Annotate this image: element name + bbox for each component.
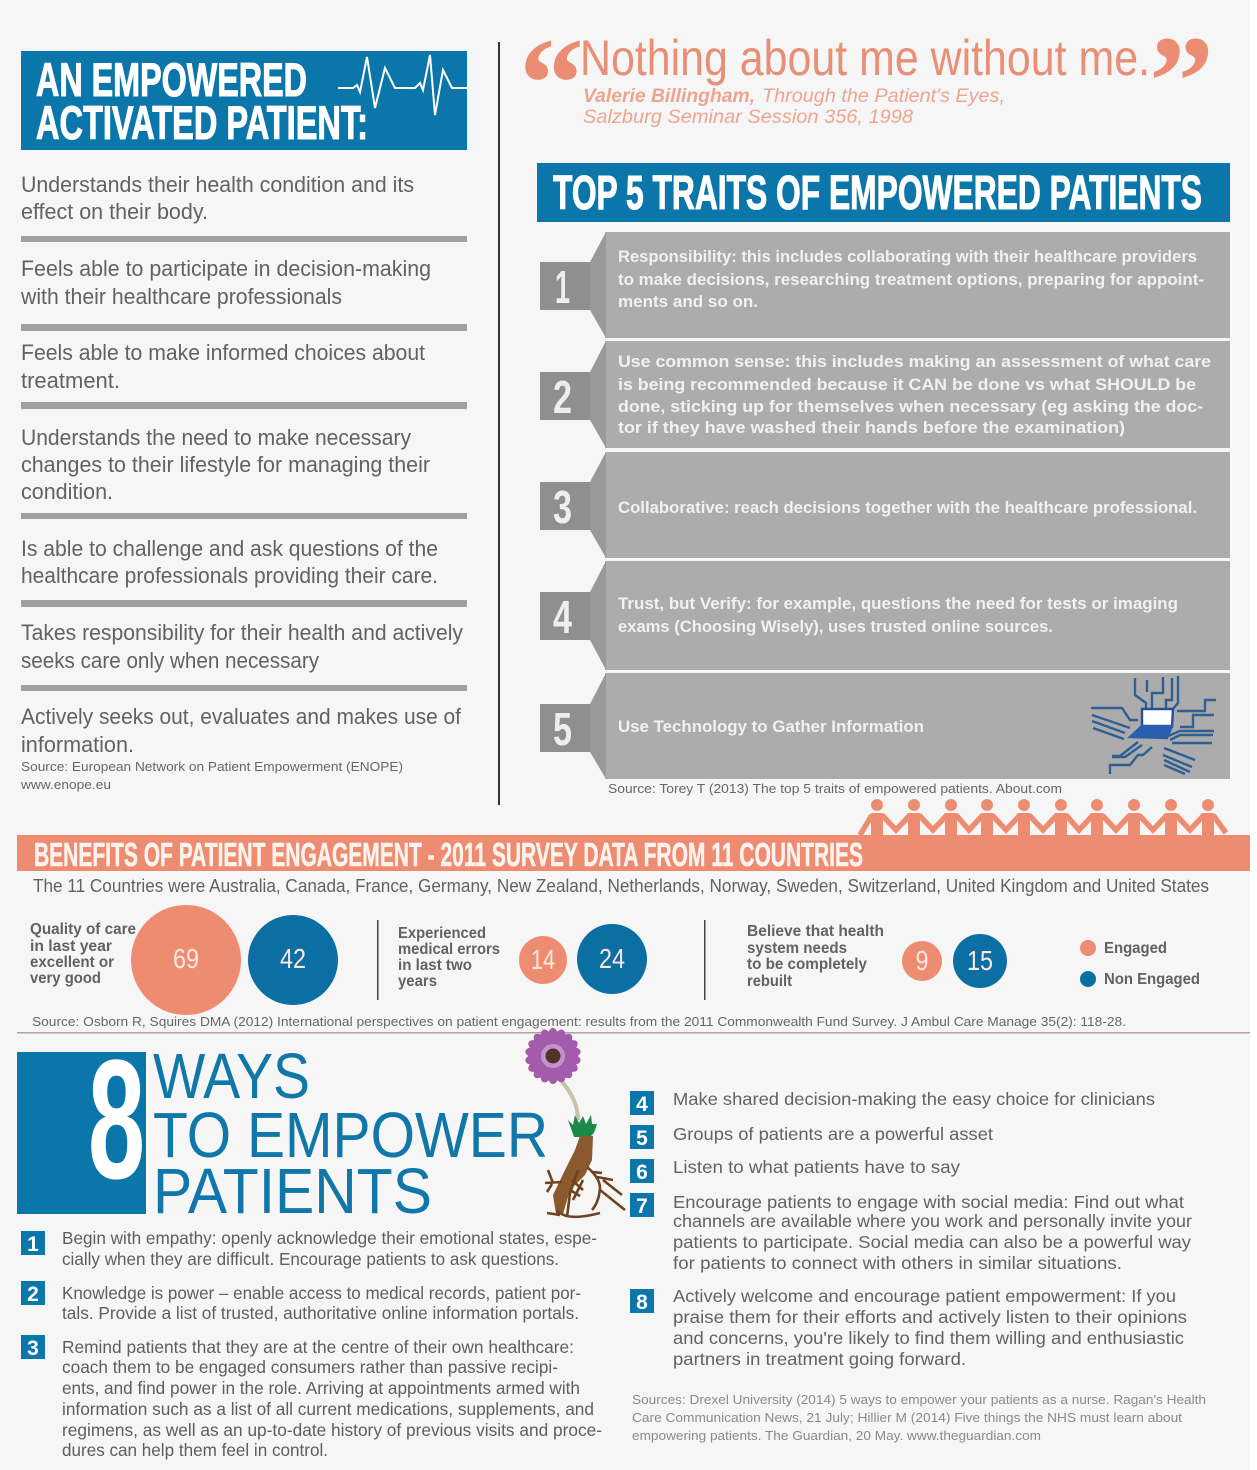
trait 1: Responsibility: this includes collaborating with their healthcare providers — [618, 247, 1197, 266]
trait 1: 1 — [555, 261, 570, 313]
list item 4: condition. — [21, 479, 113, 504]
way 3: Remind patients that they are at the centre of their own healthcare: — [62, 1337, 574, 1357]
quote attribution: Salzburg Seminar Session 356, 1998 — [583, 107, 913, 128]
legend — [1080, 940, 1200, 988]
heading: 8 — [88, 1025, 145, 1215]
opening quotation mark: “ — [519, 12, 584, 156]
trait 3: 3 — [553, 481, 572, 533]
way 2: tals. Provide a list of trusted, authoritative online information portals. — [62, 1303, 579, 1323]
way 5: Groups of patients are a powerful asset — [673, 1124, 993, 1144]
stat: health system rebuilt — [747, 923, 1007, 990]
trait 5: Use Technology to Gather Information — [618, 717, 924, 736]
trait 3: Collaborative: reach decisions together with the healthcare professional. — [618, 498, 1197, 517]
quote attribution: Through the Patient's Eyes, — [762, 86, 1005, 107]
list item 1: Understands their health condition and its — [21, 172, 414, 197]
stat: quality of care: in last year — [30, 938, 112, 955]
icon: flower with roots — [524, 1028, 625, 1217]
panel: benefits of patient engagement — [17, 799, 1250, 1029]
way 8: 8 — [636, 1291, 648, 1314]
list item 5: healthcare professionals providing their care. — [21, 563, 438, 588]
stat: medical errors — [398, 924, 647, 994]
list item 3: treatment. — [21, 368, 120, 393]
trait 2: tor if they have washed their hands before the examination) — [618, 418, 1125, 437]
trait 1 — [540, 232, 1230, 338]
way 8 — [630, 1286, 1187, 1369]
list item 6 — [21, 620, 463, 673]
list item 5: Is able to challenge and ask questions of the — [21, 536, 438, 561]
list item 3: Feels able to make informed choices about — [21, 340, 425, 365]
source note: Source: European Network on Patient Empowerment (ENOPE) — [21, 760, 403, 774]
way 4: Make shared decision-making the easy choice for clinicians — [673, 1089, 1155, 1109]
stat: medical errors: Experienced — [398, 925, 486, 942]
trait 5: 5 — [553, 703, 572, 755]
stat: quality of care: excellent or — [30, 954, 114, 971]
stat: medical errors: 24 — [599, 943, 625, 974]
quote text: Nothing about me without me. — [580, 30, 1150, 86]
way 2 — [21, 1281, 581, 1323]
way 5 — [630, 1124, 993, 1150]
heading banner — [21, 51, 467, 150]
source note: Source: Torey T (2013) The top 5 traits of empowered patients. About.com — [608, 782, 1062, 796]
sources note: Care Communication News, 21 July; Hillier M (2014) Five things the NHS must learn about — [632, 1410, 1182, 1425]
list item 1: effect on their body. — [21, 199, 208, 224]
icon: laptop circuit — [1091, 676, 1216, 774]
heading: PATIENTS — [153, 1155, 432, 1227]
way 3 — [21, 1335, 602, 1460]
way 3: coach them to be engaged consumers rather than passive recipi- — [62, 1357, 558, 1377]
trait 4: Trust, but Verify: for example, questions the need for tests or imaging — [618, 594, 1178, 613]
way 3: information such as a list of all current medications, supplements, and — [62, 1399, 594, 1419]
trait 2: Use common sense: this includes making an assessment of what care — [618, 352, 1211, 371]
list item 6: seeks care only when necessary — [21, 648, 319, 673]
way 4 — [630, 1089, 1155, 1116]
way 1: Begin with empathy: openly acknowledge their emotional states, espe- — [62, 1228, 597, 1248]
legend: Non Engaged — [1104, 971, 1200, 988]
stat: quality of care — [30, 905, 338, 1015]
heading: WAYS — [153, 1040, 310, 1112]
list item 1 — [21, 172, 414, 224]
way 2: 2 — [27, 1283, 39, 1306]
way 7: 7 — [636, 1195, 648, 1218]
quote attribution: Valerie Billingham, — [583, 86, 755, 107]
source note: Source: Osborn R, Squires DMA (2012) International perspectives on patient engagement: results from the 2011 Commonwealth Fund Survey. J Ambul Care Manage 35(2): 118-28. — [32, 1015, 1126, 1029]
closing quotation mark: ” — [1149, 10, 1214, 154]
stat: quality of care: 42 — [280, 943, 306, 974]
way 7 — [630, 1192, 1192, 1273]
list item 2 — [20, 256, 431, 309]
trait 5 — [540, 673, 1230, 779]
trait 1: to make decisions, researching treatment options, preparing for appoint- — [618, 270, 1204, 289]
heading banner: AN EMPOWERED — [36, 53, 307, 106]
list item 4: Understands the need to make necessary — [21, 425, 411, 450]
stat: quality of care: Quality of care — [30, 921, 136, 938]
heading: TO EMPOWER — [153, 1099, 548, 1171]
list item 4: changes to their lifestyle for managing their — [21, 452, 430, 477]
quote attribution — [583, 86, 1005, 128]
panel: top 5 traits — [537, 163, 1230, 796]
sources note: Sources: Drexel University (2014) 5 ways to empower your patients as a nurse. Ragan's Health — [632, 1392, 1206, 1407]
way 6 — [630, 1157, 960, 1184]
list item 5 — [21, 536, 438, 588]
heading banner: ACTIVATED PATIENT: — [36, 96, 368, 149]
trait 1: ments and so on. — [618, 292, 758, 311]
list item 7: information. — [21, 732, 134, 757]
stat: health system rebuilt: 9 — [916, 945, 928, 976]
stat: quality of care: 69 — [173, 943, 199, 974]
stat: health system rebuilt: 15 — [967, 945, 993, 976]
list item 2: Feels able to participate in decision-making — [21, 256, 431, 281]
way 8: and concerns, you're likely to find them willing and enthusiastic — [673, 1328, 1184, 1348]
way 8: Actively welcome and encourage patient empowerment: If you — [673, 1286, 1176, 1306]
trait 3 — [540, 452, 1230, 558]
stat: medical errors: years — [398, 973, 437, 990]
heading — [17, 1025, 548, 1227]
way 7: channels are available where you work and personally invite your — [673, 1211, 1192, 1231]
way 2: Knowledge is power – enable access to medical records, patient por- — [62, 1283, 581, 1303]
way 8: praise them for their efforts and actively listen to their opinions — [673, 1307, 1187, 1327]
way 4: 4 — [636, 1093, 648, 1116]
icon: row of people holding hands — [860, 799, 1226, 836]
stat: medical errors: 14 — [531, 944, 555, 975]
stat: quality of care: very good — [30, 970, 101, 987]
trait 4: 4 — [553, 591, 572, 643]
countries note: The 11 Countries were Australia, Canada, France, Germany, New Zealand, Netherlands, Norway, Sweden, Switzerland, United Kingdom and United States — [33, 876, 1209, 896]
trait 2: is being recommended because it CAN be done vs what SHOULD be — [618, 375, 1196, 394]
trait 4: exams (Choosing Wisely), uses trusted online sources. — [618, 617, 1053, 636]
stat: medical errors: medical errors — [398, 941, 500, 958]
way 7: Encourage patients to engage with social media: Find out what — [673, 1192, 1184, 1212]
panel: an empowered activated patient — [20, 51, 467, 792]
list item 7 — [21, 704, 462, 757]
legend: Engaged — [1104, 940, 1167, 957]
way 1 — [21, 1228, 597, 1269]
source note: www.enope.eu — [20, 778, 111, 792]
panel: 8 ways to empower patients — [17, 1025, 1206, 1460]
trait 2 — [540, 341, 1230, 448]
way 8: partners in treatment going forward. — [673, 1349, 966, 1369]
trait 2: 2 — [553, 371, 572, 423]
way 6: Listen to what patients have to say — [673, 1157, 960, 1177]
list item 6: Takes responsibility for their health and actively — [21, 620, 463, 645]
quote — [519, 10, 1214, 156]
way 7: for patients to connect with others in similar situations. — [673, 1253, 1122, 1273]
sources note: empowering patients. The Guardian, 20 May. www.theguardian.com — [632, 1428, 1041, 1443]
stat: medical errors: in last two — [398, 957, 472, 974]
way 3: 3 — [27, 1337, 39, 1360]
way 7: patients to participate. Social media can also be a powerful way — [673, 1232, 1191, 1252]
way 1: cially when they are difficult. Encourage patients to ask questions. — [62, 1249, 559, 1269]
trait 4 — [540, 561, 1230, 670]
stat: health system rebuilt: system needs — [747, 940, 847, 957]
stat: health system rebuilt: Believe that health — [747, 923, 884, 940]
stat: health system rebuilt: to be completely — [747, 956, 867, 973]
way 3: ents, and find power in the role. Arriving at appointments armed with — [62, 1378, 580, 1398]
way 3: regimens, as well as an up-to-date history of previous visits and proce- — [62, 1420, 602, 1440]
trait 2: done, sticking up for themselves when necessary (eg asking the doc- — [618, 397, 1203, 416]
way 6: 6 — [636, 1161, 648, 1184]
list item 3 — [21, 340, 425, 393]
stat: health system rebuilt: rebuilt — [747, 973, 792, 990]
sources note — [632, 1392, 1206, 1443]
way 1: 1 — [27, 1233, 39, 1256]
way 3: dures can help them feel in control. — [62, 1440, 328, 1460]
source note — [20, 760, 403, 792]
way 5: 5 — [636, 1127, 648, 1150]
list item 4 — [21, 425, 430, 504]
list item 7: Actively seeks out, evaluates and makes use of — [21, 704, 462, 729]
list item 2: with their healthcare professionals — [20, 284, 342, 309]
